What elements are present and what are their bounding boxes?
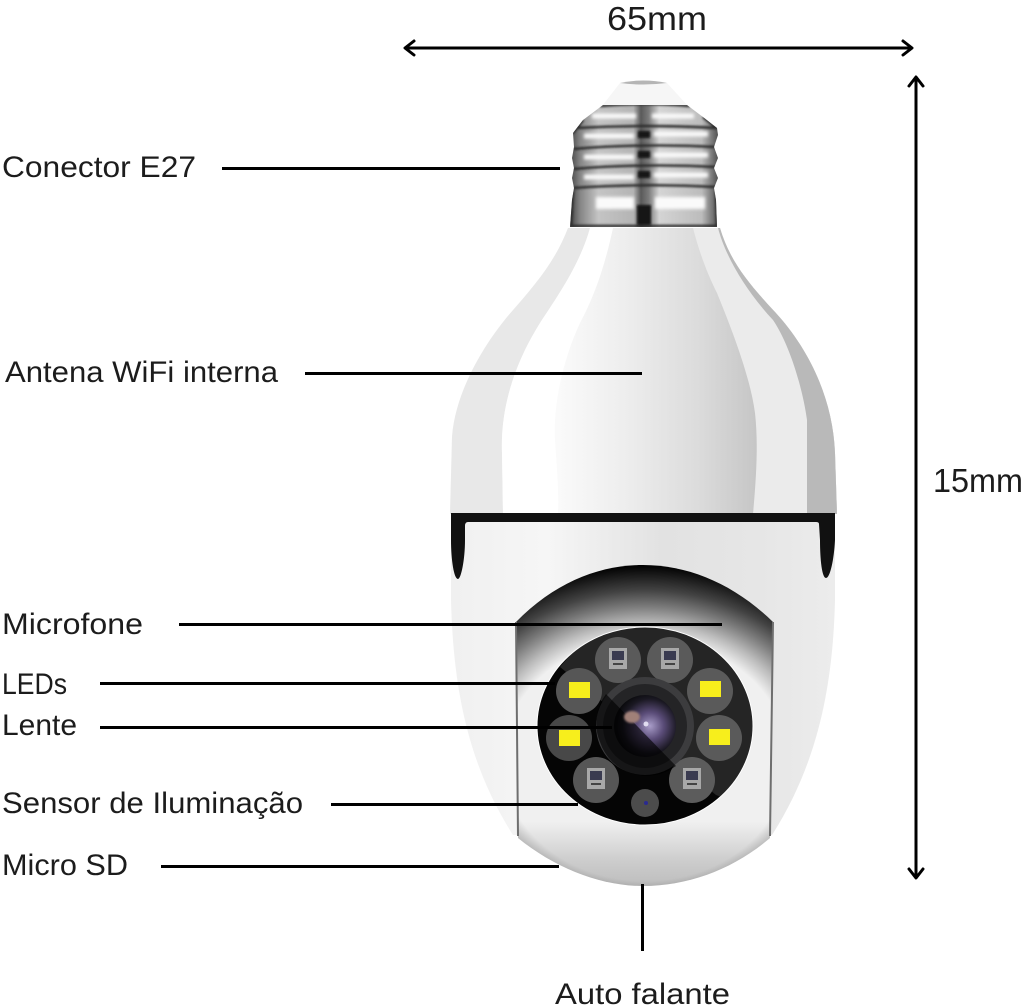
panel: lower body housing — [451, 520, 835, 835]
panel: lens ring — [537, 620, 770, 825]
arrow: height dimension — [909, 77, 923, 878]
label: Sensor de Iluminação: Sensor de Iluminação — [2, 787, 303, 820]
line: LEDs — [100, 682, 555, 685]
icon: camera lens — [596, 677, 694, 776]
label: 15mm: 15mm — [933, 462, 1023, 499]
white highlight strip — [568, 228, 613, 334]
icon: E27 metal screw base — [568, 104, 720, 230]
right light strip — [693, 228, 807, 513]
icon: infrared sensors — [573, 637, 715, 803]
line: Lente — [100, 726, 612, 729]
left soft shade strip — [445, 228, 590, 514]
label: Conector E27: Conector E27 — [2, 151, 196, 184]
panel: camera head — [515, 565, 774, 886]
line: Auto falante — [641, 884, 644, 951]
label: Microfone: Microfone — [2, 608, 143, 641]
arrow: width dimension — [405, 41, 912, 55]
line: Antena WiFi interna — [305, 372, 642, 375]
line: Conector E27 — [222, 167, 560, 170]
icon: yellow LEDs — [546, 668, 742, 761]
icon: E27 white cap tip — [602, 80, 688, 106]
panel: upper bulb housing — [445, 225, 840, 517]
label: Micro SD: Micro SD — [2, 849, 128, 882]
line: Sensor de Iluminação — [331, 803, 578, 806]
icon: light sensor — [631, 789, 659, 817]
icon: black seam band — [451, 513, 835, 579]
label: Lente: Lente — [2, 709, 77, 742]
label: Antena WiFi interna: Antena WiFi interna — [5, 356, 278, 389]
label: LEDs: LEDs — [2, 668, 67, 701]
line: Micro SD — [161, 865, 559, 868]
line: Microfone — [179, 623, 722, 626]
right gray strip — [718, 228, 840, 514]
label: 65mm: 65mm — [607, 0, 707, 37]
